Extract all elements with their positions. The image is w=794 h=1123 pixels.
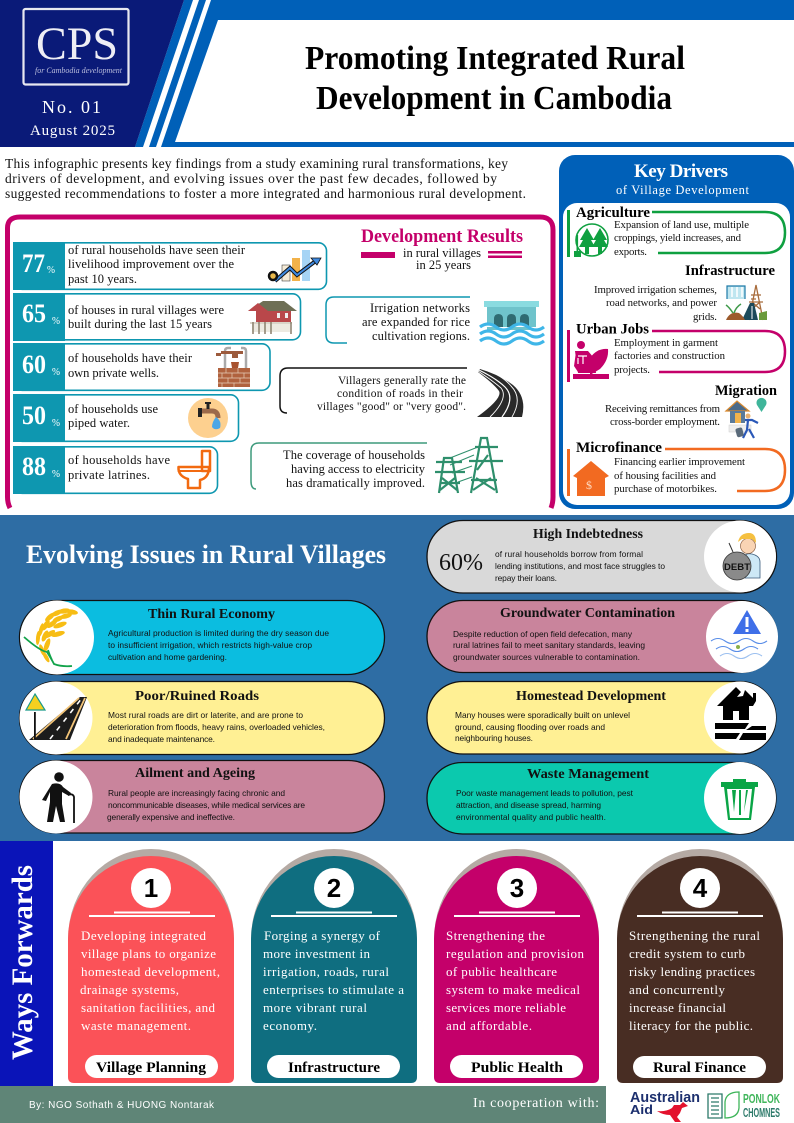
logo: CPS: CPS bbox=[36, 18, 118, 70]
card 1: village planning: waste management. bbox=[81, 1018, 191, 1033]
authors: By: NGO Sothath & HUONG Nontarak bbox=[29, 1100, 215, 1111]
intro text: This infographic presents key findings from a study examining rural transformations, key bbox=[5, 156, 508, 171]
card 3: public health: of public healthcare bbox=[446, 964, 557, 979]
icon: winding road bbox=[477, 368, 523, 417]
issue: groundwater contamination bbox=[427, 600, 778, 673]
card 1: village planning: village plans to organize bbox=[81, 946, 216, 961]
driver: agriculture: exports. bbox=[614, 246, 647, 258]
icon: rice bbox=[24, 607, 78, 666]
callout: electricity: has dramatically improved. bbox=[286, 476, 425, 490]
stat: 50% piped water: of households use bbox=[68, 402, 158, 416]
issue: high indebtedness: High Indebtedness bbox=[533, 527, 644, 542]
stat: 60% wells: own private wells. bbox=[68, 366, 159, 380]
driver: microfinance: Microfinance bbox=[576, 440, 663, 456]
issue date: August 2025 bbox=[30, 123, 115, 139]
driver: agriculture: croppings, yield increases, and bbox=[614, 232, 742, 244]
driver: agriculture bbox=[567, 205, 785, 258]
driver: microfinance bbox=[567, 440, 785, 496]
stat: 50% piped water: piped water. bbox=[68, 416, 130, 430]
icon: water warning bbox=[711, 610, 767, 658]
icon: debt bomb bbox=[723, 533, 760, 580]
issue: high indebtedness bbox=[427, 520, 776, 593]
stat: 65% houses: 65 bbox=[22, 299, 46, 328]
title: Promoting Integrated Rural bbox=[305, 40, 685, 77]
driver: infrastructure: Infrastructure bbox=[685, 263, 776, 279]
icon: migrant with luggage bbox=[726, 398, 767, 438]
issue: thin rural economy: Thin Rural Economy bbox=[148, 607, 275, 622]
stat: 88% latrines bbox=[13, 446, 218, 494]
callout: roads: villages "good" or "very good". bbox=[317, 401, 466, 413]
icon: elderly person with cane bbox=[42, 772, 74, 823]
issue: high indebtedness: repay their loans. bbox=[495, 573, 557, 583]
driver: agriculture: Agriculture bbox=[576, 205, 651, 221]
title: Development in Cambodia bbox=[316, 80, 672, 117]
panel: key drivers bbox=[559, 155, 794, 509]
callout: electricity: having access to electricity bbox=[291, 462, 426, 476]
stat: 60% wells: % bbox=[52, 367, 60, 378]
issue: groundwater contamination: groundwater sources vulnerable to contamination. bbox=[453, 652, 640, 662]
driver: microfinance: purchase of motorbikes. bbox=[614, 483, 717, 495]
icon: stilt house bbox=[248, 301, 297, 334]
driver: infrastructure bbox=[594, 263, 776, 323]
stat: 60% wells bbox=[13, 343, 270, 391]
number 2: 2 bbox=[327, 873, 341, 903]
issue: poor roads: Most rural roads are dirt or laterite, and are prone to bbox=[108, 710, 303, 720]
stat: 50% piped water: 50 bbox=[22, 401, 46, 430]
card 3: public health: system to make medical bbox=[446, 982, 580, 997]
icon: irrigation gate bbox=[480, 301, 544, 344]
stat: 88% latrines: % bbox=[52, 469, 60, 480]
callout: irrigation: cultivation regions. bbox=[372, 329, 470, 343]
icon: water tap bbox=[188, 398, 228, 438]
card 3: public health: regulation and provision bbox=[446, 946, 584, 961]
issue: poor roads: and inadequate maintenance. bbox=[108, 734, 215, 744]
heading: key drivers: Key Drivers bbox=[634, 161, 728, 182]
number 1 bbox=[131, 868, 171, 908]
issue: poor roads: Poor/Ruined Roads bbox=[135, 689, 260, 704]
label: rural finance bbox=[633, 1056, 766, 1078]
statistic: 60%: 60% bbox=[439, 550, 483, 576]
driver: urban jobs: factories and construction bbox=[614, 350, 726, 362]
icon: brick well bbox=[216, 348, 250, 387]
driver: microfinance: Financing earlier improvement bbox=[614, 456, 745, 468]
icon: house with dollar sign: $ bbox=[586, 478, 592, 492]
stat: 65% houses: % bbox=[52, 316, 60, 327]
card 2: infrastructure: enterprises to stimulate a bbox=[263, 982, 404, 997]
issue: ailment and ageing: Rural people are increasingly facing chronic and bbox=[108, 788, 285, 798]
heading: key drivers: of Village Development bbox=[616, 183, 750, 197]
stat: 88% latrines: private latrines. bbox=[68, 468, 150, 482]
driver: migration bbox=[605, 383, 777, 438]
sidebar: ways forwards bbox=[0, 841, 53, 1086]
icon: garment worker bbox=[573, 341, 609, 379]
callout: electricity: The coverage of households bbox=[283, 448, 425, 462]
driver: urban jobs bbox=[567, 322, 785, 382]
stat: 65% houses: built during the last 15 years bbox=[68, 317, 212, 331]
icon: debt bomb: DEBT bbox=[724, 562, 750, 573]
issue: ailment and ageing bbox=[20, 760, 384, 834]
icon: damaged house bbox=[715, 687, 766, 740]
card 4: rural finance: credit system to curb bbox=[629, 946, 745, 961]
issue: groundwater contamination: Groundwater Contamination bbox=[500, 606, 675, 621]
issue: thin rural economy bbox=[20, 600, 384, 674]
issue: poor roads: deterioration from floods, heavy rains, overloaded vehicles, bbox=[108, 722, 325, 732]
issue: waste management: environmental quality and public health. bbox=[456, 812, 606, 822]
driver: infrastructure: Improved irrigation schemes, bbox=[594, 284, 717, 296]
footer bbox=[0, 1086, 780, 1123]
card 1: village planning: drainage systems, bbox=[80, 982, 179, 997]
card 2: infrastructure bbox=[251, 849, 417, 1083]
issue: ailment and ageing: Ailment and Ageing bbox=[135, 766, 255, 781]
icon: trash bin bbox=[721, 779, 758, 820]
card 1: village planning bbox=[68, 849, 234, 1083]
stat: 77% livelihood: of rural households have seen their bbox=[68, 243, 246, 257]
callout: roads: Villagers generally rate the bbox=[338, 375, 466, 387]
driver: infrastructure: road networks, and power bbox=[606, 297, 717, 309]
card 4: rural finance: increase financial bbox=[629, 1000, 726, 1015]
intro text bbox=[5, 156, 526, 201]
stat: 77% livelihood: past 10 years. bbox=[68, 272, 137, 286]
label: public health bbox=[450, 1055, 583, 1078]
header banner bbox=[0, 0, 794, 147]
card 2: infrastructure: irrigation, roads, rural bbox=[263, 964, 389, 979]
card 4: rural finance: Strengthening the rural bbox=[629, 928, 760, 943]
driver: infrastructure: grids. bbox=[693, 311, 717, 323]
number 4: 4 bbox=[693, 873, 708, 903]
issue number: No. 01 bbox=[42, 97, 101, 117]
intro text: drivers of development, and evolving issues over the past few decades, followed by bbox=[5, 171, 497, 186]
intro text: suggested recommendations to foster a more integrated and harmonious rural development. bbox=[5, 186, 526, 201]
logo: Ponlok Chomnes bbox=[708, 1091, 780, 1120]
issue: ailment and ageing: noncommunicable diseases, while medical services are bbox=[108, 800, 305, 810]
stat: 65% houses bbox=[13, 293, 300, 341]
card 2: infrastructure: Forging a synergy of bbox=[264, 928, 381, 943]
issue: groundwater contamination: Despite reduction of open field defecation, many bbox=[453, 629, 633, 639]
issue: poor roads bbox=[20, 682, 384, 754]
callout: roads: condition of roads in their bbox=[337, 388, 463, 400]
number 3 bbox=[497, 868, 537, 908]
heading: development results: Development Results bbox=[361, 227, 523, 247]
heading: evolving issues: Evolving Issues in Rural Villages bbox=[26, 540, 386, 569]
driver: microfinance: of housing facilities and bbox=[614, 470, 717, 482]
stat: 50% piped water bbox=[13, 394, 238, 442]
heading: development results: in 25 years bbox=[416, 258, 471, 272]
label: village planning: Village Planning bbox=[96, 1060, 207, 1076]
card 4: rural finance: risky lending practices bbox=[629, 964, 755, 979]
driver: urban jobs: projects. bbox=[614, 364, 650, 376]
stat: 60% wells: 60 bbox=[22, 350, 46, 379]
number 4 bbox=[680, 868, 720, 908]
icon: road and sign bbox=[26, 694, 87, 740]
heading: key drivers bbox=[616, 161, 750, 197]
issue: ailment and ageing: generally expensive and ineffective. bbox=[107, 812, 235, 822]
panel: development results bbox=[8, 217, 553, 508]
number 2 bbox=[314, 868, 354, 908]
issue: groundwater contamination: rural latrines fail to meet sanitary standards, leaving bbox=[453, 640, 645, 650]
title bbox=[305, 40, 685, 117]
stat: 77% livelihood: % bbox=[47, 265, 55, 276]
card 3: public health: Strengthening the bbox=[446, 928, 545, 943]
card 1: village planning: sanitation facilities, and bbox=[81, 1000, 216, 1015]
stat: 60% wells: of households have their bbox=[68, 351, 193, 365]
card 3: public health bbox=[434, 849, 599, 1083]
number 1: 1 bbox=[144, 873, 158, 903]
issue: homestead development: Many houses were sporadically built on unlevel bbox=[455, 710, 630, 720]
icon: trees bbox=[574, 224, 608, 257]
label: public health: Public Health bbox=[471, 1060, 564, 1076]
card 1: village planning: homestead development, bbox=[81, 964, 220, 979]
driver: migration: Migration bbox=[715, 383, 777, 399]
label: infrastructure bbox=[267, 1055, 400, 1078]
icon: house with dollar sign bbox=[573, 461, 609, 496]
driver: urban jobs: Employment in garment bbox=[614, 337, 718, 349]
number 3: 3 bbox=[510, 873, 524, 903]
icon: toilet bbox=[178, 451, 210, 488]
issue: waste management bbox=[427, 762, 776, 834]
label: infrastructure: Infrastructure bbox=[288, 1060, 380, 1076]
icon: growth chart bbox=[269, 250, 321, 281]
driver: migration: Receiving remittances from bbox=[605, 403, 721, 415]
card 4: rural finance: and concurrently bbox=[629, 982, 726, 997]
issue: waste management: attraction, and disease spread, harming bbox=[456, 800, 601, 810]
card 2: infrastructure: more vibrant rural bbox=[263, 1000, 367, 1015]
issue: waste management: Poor waste management leads to pollution, pest bbox=[456, 788, 634, 798]
card 2: infrastructure: more investment in bbox=[263, 946, 370, 961]
issue: thin rural economy: Agricultural production is limited during the dry season due bbox=[108, 628, 329, 638]
card 3: public health: and affordable. bbox=[446, 1018, 532, 1033]
callout: irrigation: are expanded for rice bbox=[362, 315, 470, 329]
issue: homestead development: Homestead Development bbox=[516, 689, 666, 704]
card 4: rural finance: literacy for the public. bbox=[629, 1018, 753, 1033]
stat: 77% livelihood bbox=[13, 242, 326, 290]
issue: high indebtedness: of rural households borrow from formal bbox=[495, 549, 643, 559]
stat: 50% piped water: % bbox=[52, 418, 60, 429]
issue: homestead development: ground, causing flooding over roads and bbox=[455, 722, 605, 732]
sidebar: ways forwards: Ways Forwards bbox=[6, 865, 39, 1060]
card 4: rural finance bbox=[617, 849, 783, 1083]
heading: development results bbox=[361, 227, 523, 272]
logo: CPS bbox=[24, 9, 128, 84]
issue: high indebtedness: lending institutions, and most face struggles to bbox=[495, 561, 665, 571]
stat: 88% latrines: 88 bbox=[22, 452, 46, 481]
stat: 77% livelihood: livelihood improvement over the bbox=[68, 257, 234, 271]
section: evolving issues bbox=[0, 515, 794, 841]
driver: urban jobs: Urban Jobs bbox=[576, 322, 649, 338]
icon: power pylons bbox=[435, 438, 503, 493]
issue: homestead development: neighbouring houses. bbox=[455, 733, 533, 743]
callout: irrigation bbox=[326, 297, 544, 344]
heading: development results: in rural villages bbox=[403, 246, 481, 260]
driver: agriculture: Expansion of land use, multiple bbox=[614, 219, 749, 231]
logo: Australian Aid: Aid bbox=[630, 1102, 653, 1117]
stat: 65% houses: of houses in rural villages were bbox=[68, 303, 224, 317]
stat: 88% latrines: of households have bbox=[68, 453, 170, 467]
logo: Australian Aid: Australian bbox=[630, 1090, 700, 1106]
issue: thin rural economy: cultivation and home gardening. bbox=[108, 652, 227, 662]
logo: CPS: for Cambodia development bbox=[35, 66, 123, 75]
cooperation label: In cooperation with: bbox=[473, 1096, 599, 1111]
card 1: village planning: Developing integrated bbox=[81, 928, 206, 943]
label: village planning bbox=[85, 1055, 218, 1078]
driver: migration: cross-border employment. bbox=[610, 416, 720, 428]
card 2: infrastructure: economy. bbox=[263, 1018, 317, 1033]
card 3: public health: services more reliable bbox=[446, 1000, 566, 1015]
label: rural finance: Rural Finance bbox=[653, 1060, 746, 1076]
issue: thin rural economy: to insufficient irrigation, which restricts high-value crop bbox=[108, 640, 312, 650]
logo: Australian Aid bbox=[630, 1090, 700, 1122]
callout: electricity bbox=[251, 438, 503, 493]
issue: homestead development bbox=[427, 682, 776, 754]
icon: infrastructure bbox=[726, 285, 767, 320]
callout: roads bbox=[280, 368, 523, 417]
callout: irrigation: Irrigation networks bbox=[370, 301, 470, 315]
stat: 77% livelihood: 77 bbox=[22, 249, 45, 278]
issue: waste management: Waste Management bbox=[527, 767, 649, 782]
